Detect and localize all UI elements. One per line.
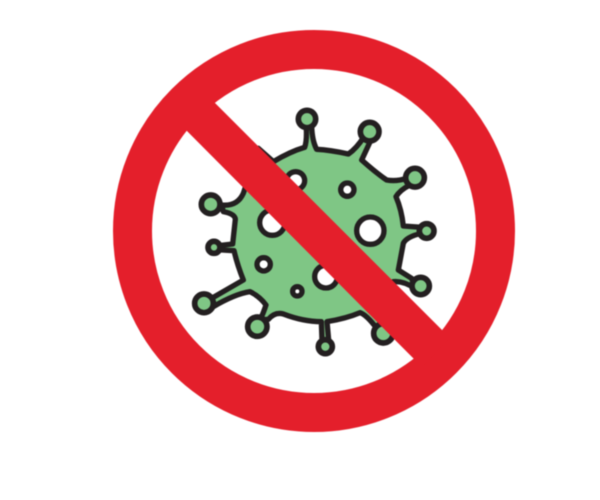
icon: green virus	[195, 110, 434, 354]
virus body with spikes	[212, 123, 422, 340]
prohibition ring	[132, 50, 496, 412]
prohibition diagonal bar	[180, 96, 450, 367]
spike tips	[195, 110, 434, 354]
virus surface holes	[257, 172, 384, 296]
